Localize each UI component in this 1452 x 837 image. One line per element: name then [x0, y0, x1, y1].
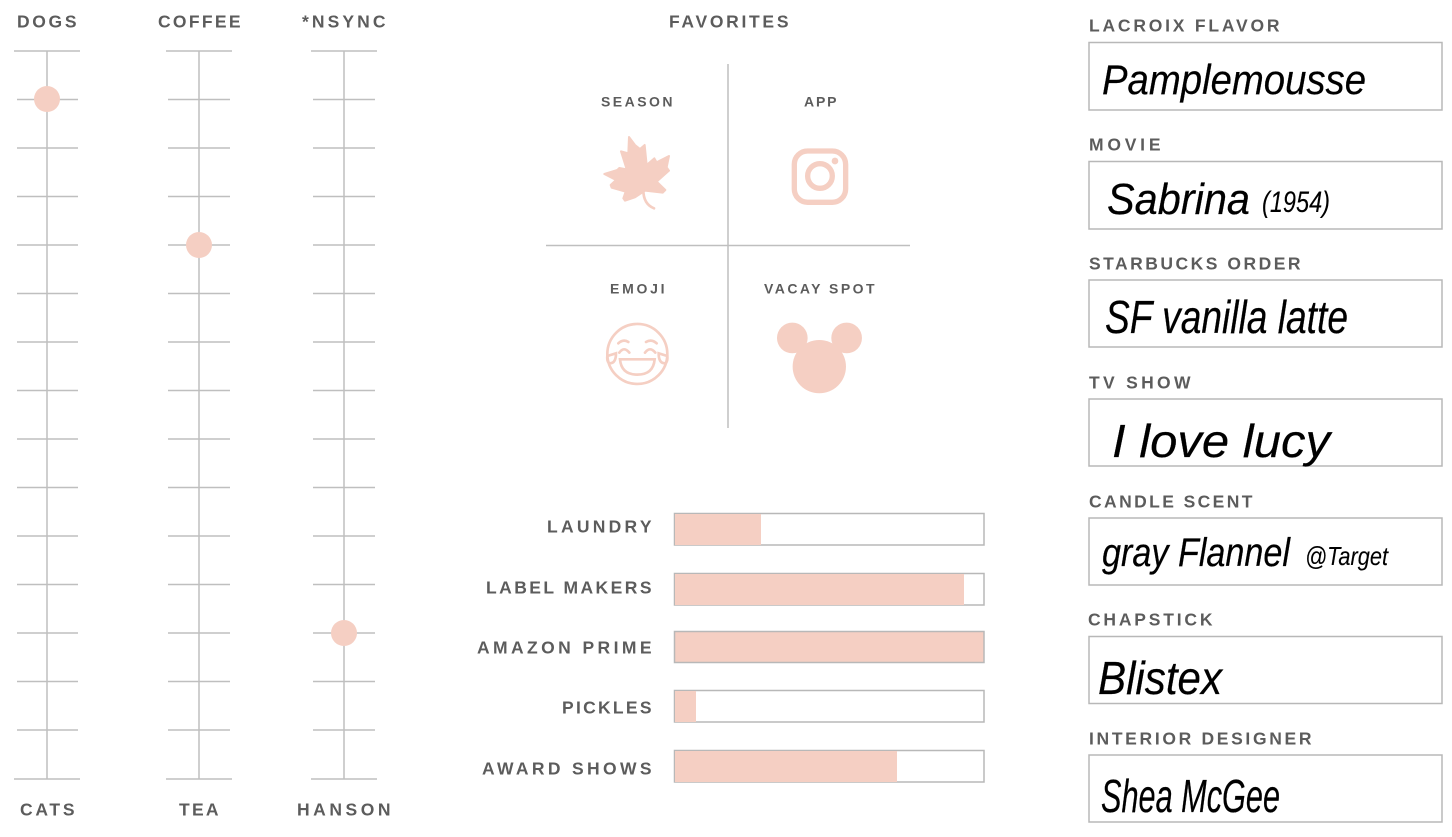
heading: nsync: *NSYNC [302, 12, 386, 32]
quadrant cross lines [546, 64, 910, 428]
field: chapstick: Blistex [1098, 652, 1224, 704]
bar row: pickles [562, 690, 984, 722]
bar row: label makers [486, 574, 984, 605]
panel: handwritten favorites list [1088, 16, 1442, 822]
panel: bar chart of loves [477, 514, 984, 782]
field: movie [1089, 134, 1442, 229]
heading: coffee: COFFEE [158, 12, 240, 32]
label: tea: TEA [179, 800, 219, 820]
label: cats: CATS [20, 800, 74, 820]
field: tv show: I love lucy [1112, 415, 1333, 467]
bar row: laundry: LAUNDRY [547, 516, 652, 536]
scale axis: nsync to hanson [311, 51, 377, 779]
field: tv show: TV SHOW [1089, 372, 1191, 392]
heading: dogs: DOGS [17, 12, 76, 32]
scale axis: coffee to tea [166, 51, 232, 779]
field: interior designer: Shea McGee [1101, 770, 1280, 822]
bar row: award shows [482, 750, 984, 782]
field: movie: Sabrina [1107, 175, 1250, 224]
icon: maple leaf [604, 137, 669, 208]
label: emoji: EMOJI [610, 280, 664, 296]
field: chapstick [1088, 610, 1442, 704]
field: candle scent [1089, 492, 1442, 585]
field: candle scent: CANDLE SCENT [1089, 492, 1253, 512]
field: chapstick: CHAPSTICK [1088, 610, 1213, 630]
field: movie: (1954) [1262, 186, 1330, 219]
label: season: SEASON [601, 94, 672, 110]
bar row: pickles: PICKLES [562, 698, 652, 718]
panel: coffee vs tea scale [158, 12, 240, 820]
icon: laughing emoji [607, 324, 667, 384]
field: interior designer [1089, 728, 1442, 822]
field: movie: MOVIE [1089, 134, 1160, 154]
field: starbucks order: SF vanilla latte [1105, 291, 1348, 343]
bar row: laundry [547, 514, 984, 545]
field: starbucks order [1089, 254, 1442, 347]
label: app: APP [804, 94, 836, 110]
bar row: award shows: AWARD SHOWS [482, 758, 652, 778]
panel: favorites quadrant [546, 12, 910, 428]
field: interior designer: INTERIOR DESIGNER [1089, 728, 1312, 748]
bar row: label makers: LABEL MAKERS [486, 578, 652, 598]
icon: instagram [794, 151, 846, 202]
scale axis: dogs to cats [14, 51, 80, 779]
field: lacroix flavor: Pamplemousse [1102, 56, 1366, 103]
label: hanson: HANSON [297, 800, 390, 820]
bar row: amazon prime [477, 632, 984, 662]
field: starbucks order: STARBUCKS ORDER [1089, 254, 1301, 274]
marker: dogs position [34, 86, 60, 112]
icon: mickey silhouette [777, 323, 862, 393]
heading: favorites: FAVORITES [669, 12, 788, 32]
field: candle scent: gray Flannel [1102, 531, 1291, 575]
label: vacay spot: VACAY SPOT [764, 280, 875, 296]
marker: hanson position [331, 620, 357, 646]
marker: coffee position [186, 232, 212, 258]
bar row: amazon prime: AMAZON PRIME [477, 638, 652, 658]
panel: dogs vs cats scale [14, 12, 80, 820]
field: candle scent: @Target [1305, 541, 1389, 571]
field: tv show [1089, 372, 1442, 467]
field: lacroix flavor: LACROIX FLAVOR [1089, 16, 1280, 36]
panel: nsync vs hanson scale [297, 12, 390, 820]
field: lacroix flavor [1089, 16, 1442, 110]
